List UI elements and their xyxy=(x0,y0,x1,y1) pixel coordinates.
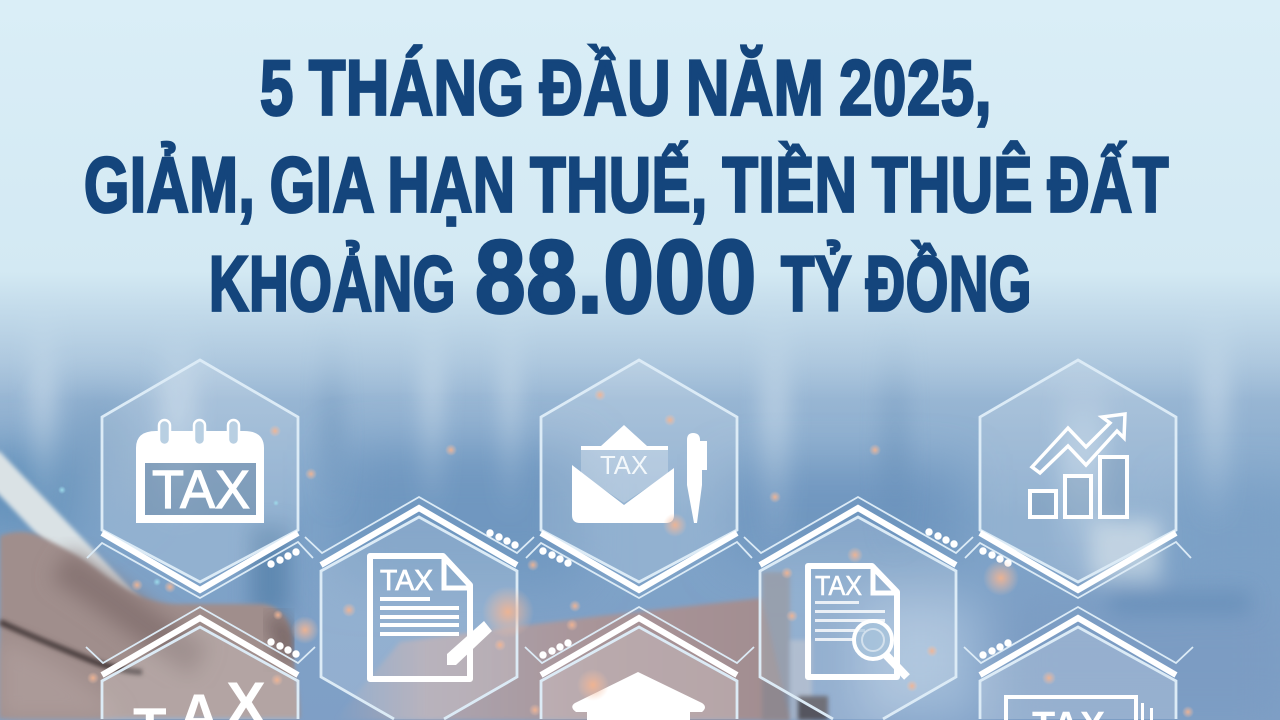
title line 1: 5 THÁNG ĐẦU NĂM 2025, xyxy=(260,44,992,132)
hexagon: tax envelope and pen: TAX xyxy=(600,450,648,480)
hexagon: house xyxy=(525,607,754,720)
hexagon frame: large tax letters xyxy=(86,607,315,719)
title line 3: KHOẢNG xyxy=(209,240,456,328)
hexagon: tax document with magnifier xyxy=(744,497,973,719)
title line 3 xyxy=(209,220,1032,336)
text: cropped TAX letters xyxy=(133,670,1105,720)
glowing sparks xyxy=(58,389,1194,718)
hexagon: tax document with pencil xyxy=(305,497,534,719)
hexagon: growth chart xyxy=(965,360,1191,598)
hexagon: tax envelope and pen xyxy=(526,360,752,598)
highlighted amount: 88.000 xyxy=(475,220,757,336)
hexagon: tax document with magnifier: TAX xyxy=(815,570,862,601)
hexagon: tax calendar: TAX xyxy=(152,460,250,520)
title line 3: TỶ ĐỒNG xyxy=(781,240,1032,328)
hexagon: tax calendar xyxy=(87,360,313,598)
pen and hand xyxy=(0,461,300,718)
title xyxy=(84,44,1169,336)
hexagon: tax receipt xyxy=(964,607,1193,720)
connector dots xyxy=(267,528,1012,659)
hexagon: tax document with pencil: TAX xyxy=(380,565,433,597)
